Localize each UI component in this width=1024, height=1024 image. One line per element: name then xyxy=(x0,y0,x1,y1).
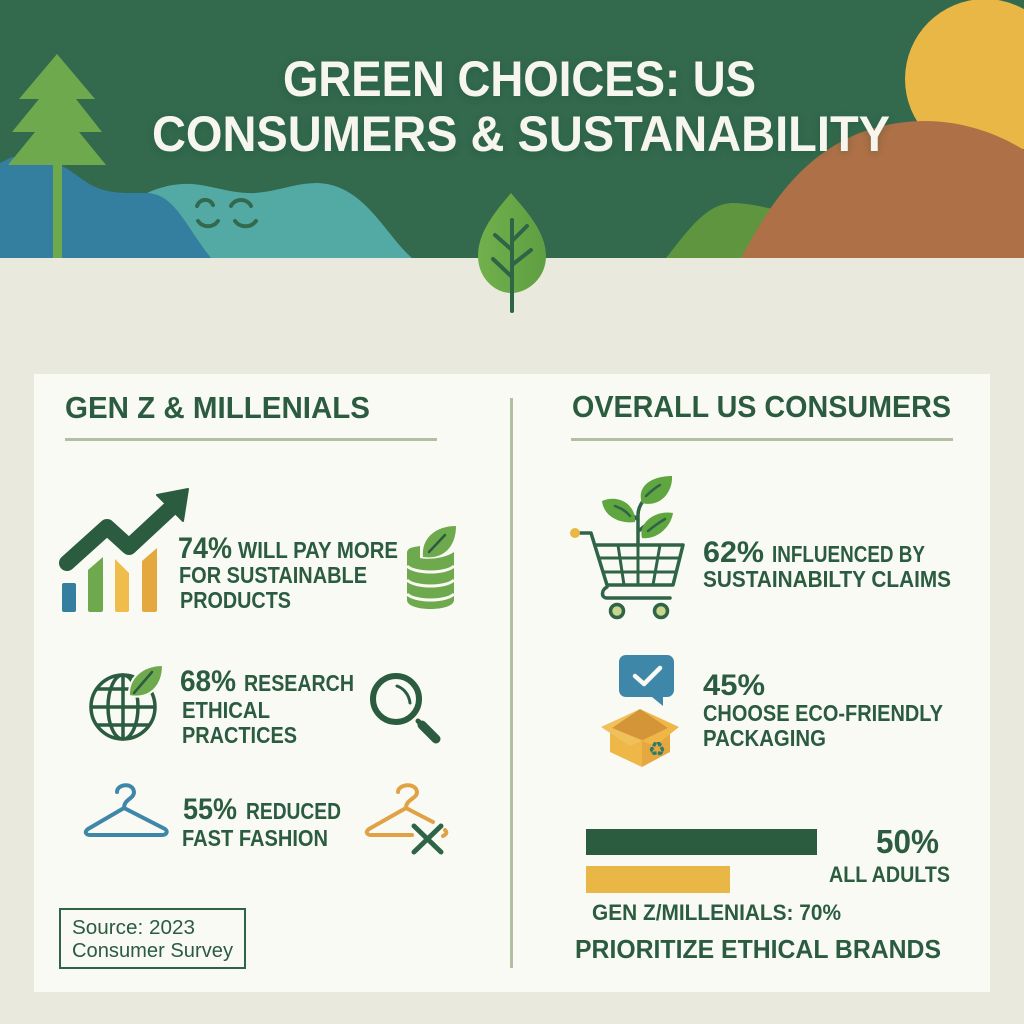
stat: 74% xyxy=(178,532,398,613)
stat: 74%: FOR SUSTAINABLE xyxy=(179,562,367,588)
source box xyxy=(60,909,245,968)
icon: shopping cart with plant xyxy=(570,476,683,618)
source box: Source: 2023 xyxy=(72,917,195,939)
stat: 50% all adults: ALL ADULTS xyxy=(829,862,950,887)
stat: 62% xyxy=(703,536,951,592)
title: GREEN CHOICES: US xyxy=(283,51,756,107)
brown hill xyxy=(741,121,1024,258)
stat: 45% xyxy=(703,669,943,751)
sun xyxy=(905,0,1024,159)
title xyxy=(152,51,890,162)
heading: Overall: OVERALL US CONSUMERS xyxy=(572,389,951,424)
stat: 55%: 55% xyxy=(183,793,237,826)
stat: 68% xyxy=(180,665,354,748)
blue wave xyxy=(0,157,211,258)
title: CONSUMERS & SUSTANABILITY xyxy=(152,106,890,162)
label: Gen Z 70%: GEN Z/MILLENIALS: 70% xyxy=(592,900,841,925)
icon: blue hanger xyxy=(86,785,167,835)
stat: 68%: RESEARCH xyxy=(244,670,354,696)
stat: 68%: ETHICAL xyxy=(182,697,270,723)
icon: recycling box xyxy=(601,709,679,767)
panel: main card xyxy=(34,374,990,992)
icon: globe with leaf xyxy=(91,665,163,739)
header banner xyxy=(0,0,1024,258)
source box: Consumer Survey xyxy=(72,940,233,962)
pine tree xyxy=(8,54,106,258)
stat: 74%: 74% xyxy=(178,532,232,565)
icon: growth chart xyxy=(62,489,188,612)
stat: 50% all adults xyxy=(829,823,950,887)
stat: 45%: CHOOSE ECO-FRIENDLY xyxy=(703,700,943,726)
icon: central leaf xyxy=(478,193,546,311)
fish or wave marks xyxy=(197,200,256,226)
stat: 68%: PRACTICES xyxy=(182,722,297,748)
stat: 45%: PACKAGING xyxy=(703,725,826,751)
center divider xyxy=(510,398,513,968)
panel: Overall US consumers xyxy=(570,389,953,964)
bar chart: ethical brands xyxy=(586,829,817,893)
icon: crossed hanger xyxy=(367,785,446,852)
stat: 45%: 45% xyxy=(703,669,765,702)
icon: magnifier xyxy=(373,676,436,739)
stat: 74%: PRODUCTS xyxy=(180,587,291,613)
stat: 55% xyxy=(182,793,341,851)
stat: 62%: 62% xyxy=(703,536,764,569)
stat: 55%: FAST FASHION xyxy=(182,825,328,851)
stat: 55%: REDUCED xyxy=(246,798,341,824)
stat: 62%: SUSTAINABILTY CLAIMS xyxy=(703,566,951,592)
stat: 68%: 68% xyxy=(180,665,236,698)
icon: coin stack with leaf xyxy=(407,526,456,609)
icon: recycling box: ♻ xyxy=(648,737,666,761)
panel: Gen Z and Millennials xyxy=(60,390,456,968)
green hill xyxy=(666,203,790,258)
stat: 50% all adults: 50% xyxy=(876,823,939,860)
caption: prioritize: PRIORITIZE ETHICAL BRANDS xyxy=(575,934,941,964)
stat: 74%: WILL PAY MORE xyxy=(238,537,398,563)
heading: Gen Z: GEN Z & MILLENIALS xyxy=(65,390,370,425)
stat: 62%: INFLUENCED BY xyxy=(772,541,925,567)
icon: speech bubble with check xyxy=(619,655,674,706)
teal wave xyxy=(147,183,412,258)
